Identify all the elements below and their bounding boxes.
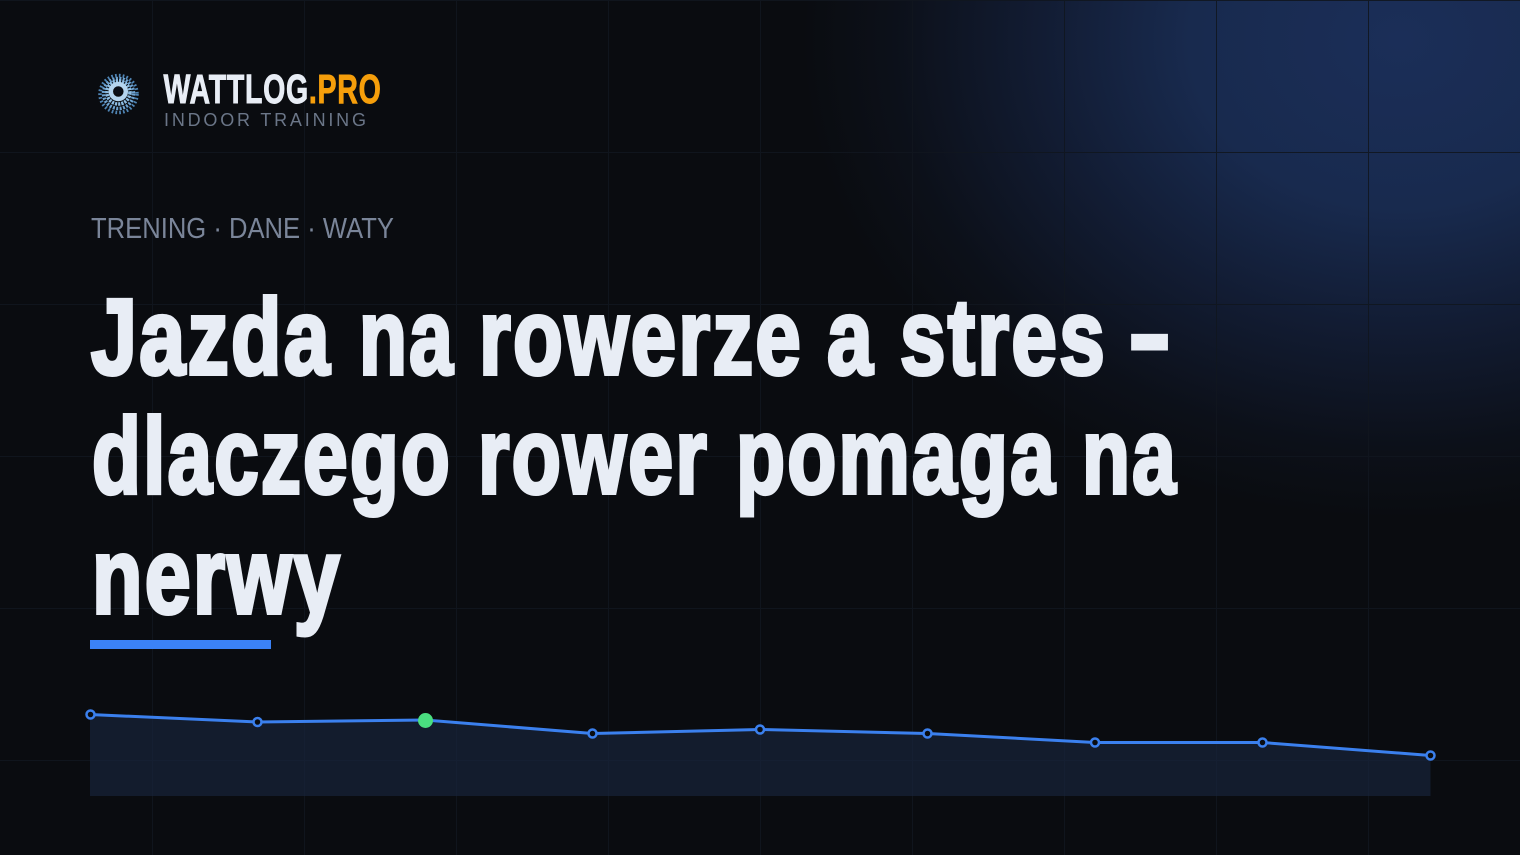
line chart [86,710,1434,796]
title: dlaczego [92,395,452,516]
chart markers [86,710,1434,760]
title underline [90,640,271,649]
title: nerwy [92,515,342,636]
logo wordmark: WATTLOG.PRO [164,66,382,112]
title: stres [900,276,1107,397]
title [91,273,1178,636]
highlighted marker [418,713,433,728]
eyebrow: TRENING · DANE · WATY [91,213,394,245]
logo: cassette icon [100,76,137,112]
title: Jazda [91,276,332,397]
title: pomaga [736,395,1057,516]
title: – [1131,273,1170,394]
title: na [359,276,455,397]
chart area [90,714,1430,796]
logo tagline: INDOOR TRAINING [164,110,366,130]
title: rowerze [479,276,803,397]
title: a [827,276,875,397]
chart line [90,714,1430,756]
title: rower [478,395,709,516]
title: na [1082,395,1178,516]
